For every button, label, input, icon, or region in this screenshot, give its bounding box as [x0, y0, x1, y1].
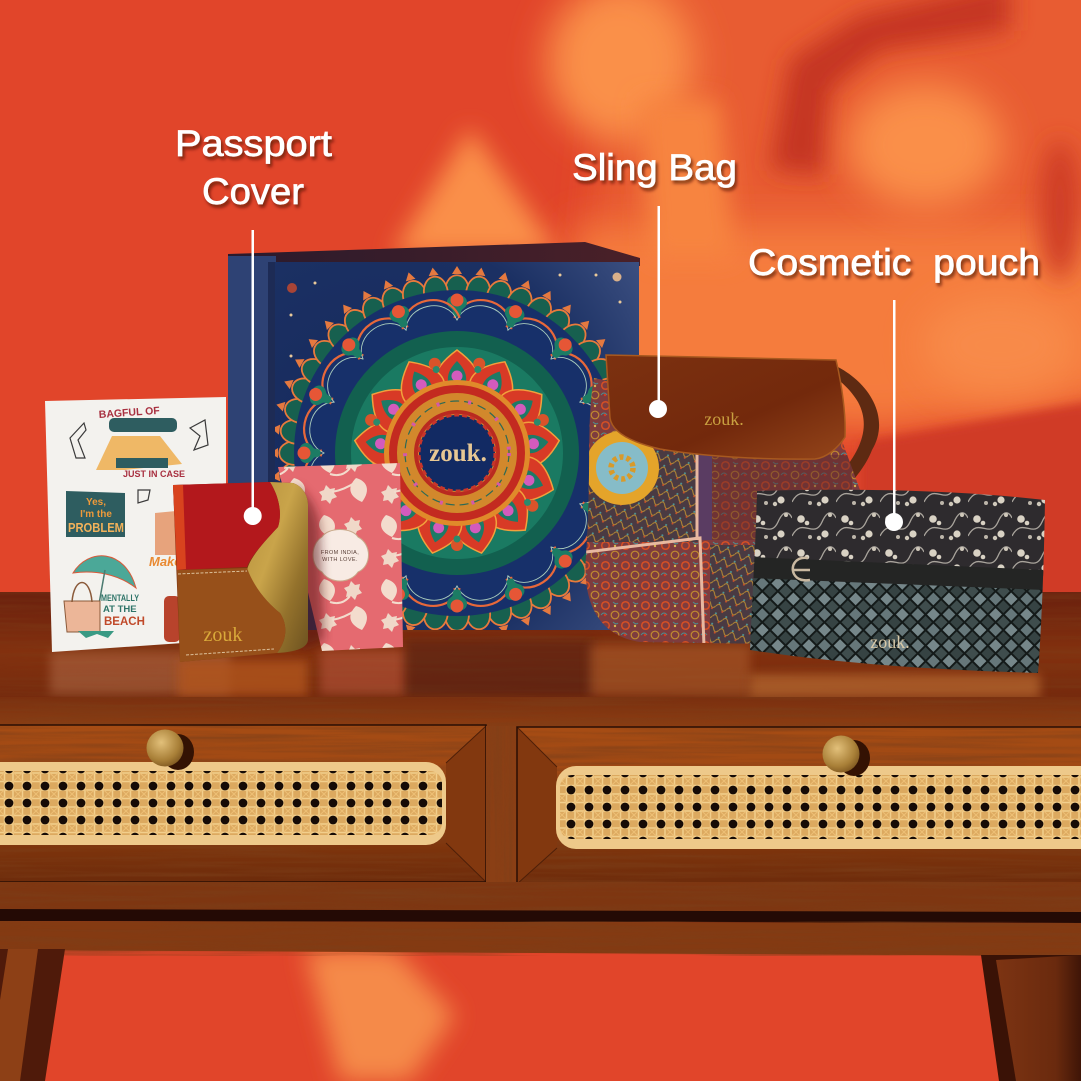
- pouch buckle: [793, 558, 810, 580]
- gift box: [228, 242, 644, 640]
- sticker: bagful of: BAGFUL OF: [98, 405, 161, 421]
- passport shadow on card: [295, 485, 324, 650]
- sticker: yes i'm the problem: Yes,: [86, 497, 106, 508]
- passport cover: [173, 482, 308, 662]
- box stars: [287, 272, 622, 358]
- table lower rails: [0, 882, 1081, 956]
- callout: passport cover: Cover: [202, 170, 304, 212]
- bag logo: zouk.: [704, 409, 744, 429]
- pouch logo: zouk.: [870, 632, 910, 652]
- box logo: zouk.: [429, 440, 487, 467]
- sticker: yes i'm the problem: [66, 491, 125, 537]
- table leg: right: [981, 955, 1081, 1081]
- box left flap: [228, 256, 276, 628]
- card message: WITH LOVE.: [322, 557, 358, 563]
- mandala: [275, 266, 607, 630]
- pouch strap: [750, 557, 1045, 590]
- pouch damask top: [748, 486, 1048, 576]
- passport logo: zouk: [204, 624, 242, 646]
- sticker: bagful of: JUST IN CASE: [123, 469, 185, 479]
- callout: cosmetic pouch: [748, 241, 1040, 531]
- box top edge: [228, 242, 640, 266]
- passport red upper: [173, 482, 280, 570]
- bag body: [585, 378, 860, 644]
- knob: left: [146, 730, 194, 770]
- sticker: bagful of: [96, 405, 185, 479]
- callout: passport cover: Passport: [175, 122, 333, 164]
- table leg: left: [0, 949, 65, 1081]
- right drawer: [517, 727, 1081, 884]
- sticker: mentally at the beach: [64, 556, 145, 638]
- passport gold wave: [247, 482, 308, 653]
- passport body: [173, 482, 308, 662]
- sticker: yes i'm the problem: I'm the: [80, 509, 112, 520]
- pouch woven bottom: [750, 578, 1043, 673]
- callout: passport cover: [175, 122, 333, 525]
- callout: sling bag: [572, 146, 737, 418]
- sticker: mentally at the beach: BEACH: [104, 616, 145, 628]
- sling bag: [580, 355, 879, 660]
- box front: [275, 262, 639, 630]
- passport brown lower: [177, 568, 285, 662]
- table top surface: [0, 592, 1081, 702]
- greeting card: [278, 463, 403, 651]
- table front rail: [0, 697, 1081, 727]
- sticker: make: [149, 511, 182, 642]
- cane panel: left: [0, 762, 446, 845]
- callout: cosmetic pouch: Cosmetic pouch: [748, 241, 1040, 283]
- bag flap: [606, 355, 845, 459]
- sticker sheet: [45, 397, 226, 652]
- sticker: mentally at the beach: AT THE: [103, 604, 137, 615]
- card message: FROM INDIA,: [321, 550, 359, 556]
- callout: sling bag: Sling Bag: [572, 146, 737, 188]
- sticker: yes i'm the problem: PROBLEM: [68, 520, 124, 535]
- knob: right: [822, 736, 870, 776]
- sticker: hand outlines: [70, 420, 208, 503]
- card message: [313, 530, 368, 581]
- centre stile: [486, 726, 517, 884]
- cane panel: right: [556, 766, 1081, 849]
- sticker: mentally at the beach: MENTALLY: [101, 593, 140, 604]
- left drawer: [0, 725, 486, 882]
- bag strap: [836, 367, 879, 482]
- sticker: make: Make: [149, 554, 182, 569]
- cosmetic pouch: [745, 486, 1050, 680]
